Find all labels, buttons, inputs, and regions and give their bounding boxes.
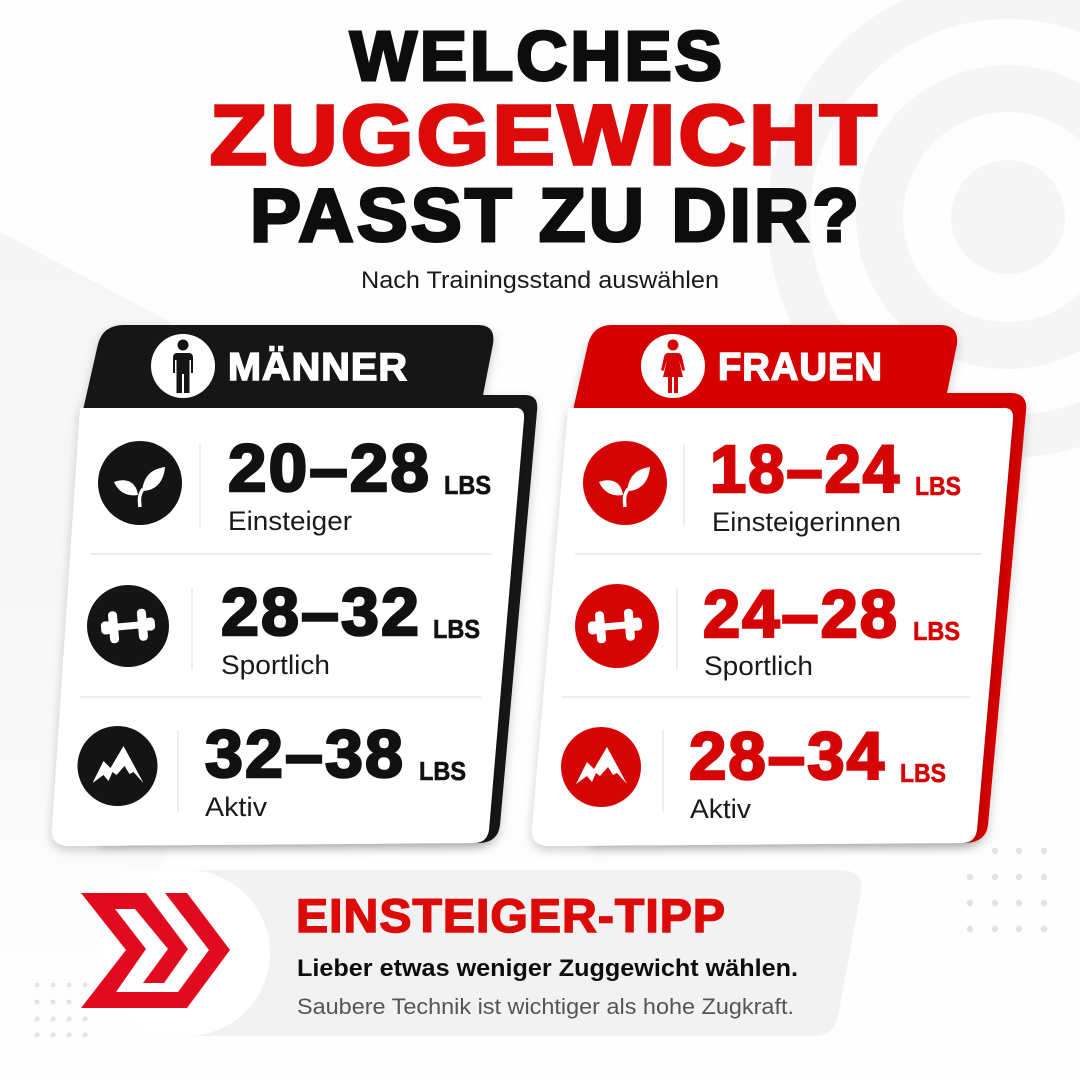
row: Aktiv: Aktiv [690, 794, 752, 824]
row: Sportlich: 28–32 [221, 575, 421, 650]
row: Aktiv [561, 719, 946, 824]
row: Aktiv: LBS [419, 756, 466, 786]
row: Einsteiger: LBS [444, 470, 491, 500]
row: Einsteigerinnen: LBS [915, 471, 961, 501]
row: Aktiv: Aktiv [205, 792, 268, 822]
header badge: FRAUEN [718, 346, 883, 389]
row: Einsteiger: Einsteiger [228, 506, 352, 536]
title: ZUGGEWICHT [210, 88, 880, 182]
row: Sportlich: LBS [433, 614, 480, 644]
panel: Frauen [532, 325, 1026, 846]
title: WELCHES [350, 17, 725, 95]
row: Sportlich: Sportlich [704, 651, 813, 681]
tip heading: EINSTEIGER-TIPP [296, 889, 726, 942]
panel: Männer [52, 325, 537, 846]
dots: right [967, 848, 1047, 932]
row: Sportlich [87, 575, 480, 680]
row: Einsteiger: 20–28 [228, 431, 431, 506]
row: Aktiv: LBS [900, 758, 946, 788]
tip line 1: Lieber etwas weniger Zuggewicht wählen. [297, 955, 798, 982]
row: Aktiv: 28–34 [689, 719, 886, 794]
white card [52, 408, 524, 846]
white card [532, 408, 1013, 846]
dots: left [34, 982, 88, 1038]
row: Sportlich: LBS [913, 616, 960, 646]
header badge: MÄNNER [228, 346, 408, 389]
row: Aktiv: 32–38 [205, 717, 405, 792]
tip line 2: Saubere Technik ist wichtiger als hohe Zugkraft. [297, 994, 794, 1019]
row: Einsteigerinnen [583, 432, 961, 537]
header badge [641, 334, 883, 398]
title: PASST ZU DIR? [250, 173, 862, 257]
subtitle: Nach Trainingsstand auswählen [361, 267, 719, 294]
row: Einsteigerinnen: 18–24 [710, 432, 901, 507]
row: Einsteiger [98, 431, 491, 536]
row: Sportlich: 24–28 [703, 577, 899, 652]
panel frame black [83, 325, 537, 843]
row: Aktiv [78, 717, 466, 822]
title [210, 17, 880, 257]
panel frame red [573, 325, 1026, 843]
row: Einsteigerinnen: Einsteigerinnen [712, 507, 901, 537]
panel: tip [34, 870, 861, 1038]
icon: chevrons [81, 893, 230, 1008]
header badge [151, 334, 408, 398]
row: Sportlich: Sportlich [221, 650, 330, 680]
row: Sportlich [575, 577, 960, 681]
